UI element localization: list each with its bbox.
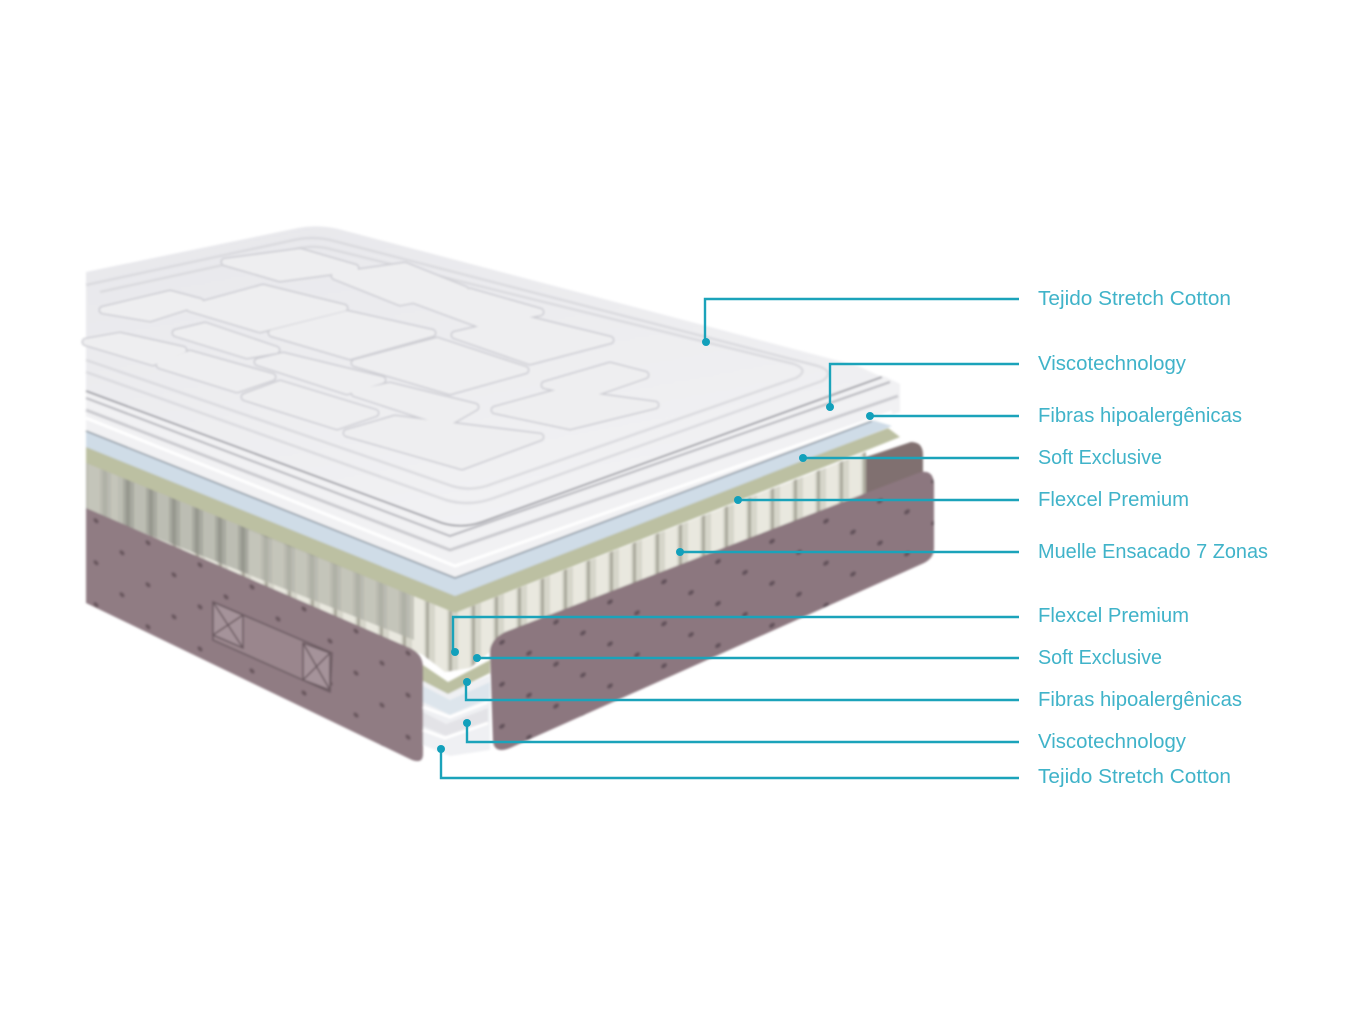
quilted top panel: [86, 226, 882, 526]
callout: Flexcel Premium bottom: Flexcel Premium: [1038, 605, 1189, 627]
callout: Flexcel Premium top: Flexcel Premium: [1038, 489, 1189, 511]
callout: Viscotechnology bottom: [463, 719, 1186, 753]
right side cover panel: [490, 472, 934, 750]
callout: Flexcel Premium bottom: [451, 605, 1189, 656]
callout: Tejido Stretch Cotton bottom: Tejido Stretch Cotton: [1038, 766, 1231, 788]
callout: Muelle Ensacado 7 Zonas: [676, 541, 1268, 563]
callout: Fibras hipoalergénicas top: Fibras hipoalergênicas: [1038, 405, 1242, 427]
quilted block pattern: [86, 252, 655, 466]
callout: Viscotechnology top: [826, 353, 1186, 411]
back foam panel: [866, 442, 923, 496]
callout: Soft Exclusive top: Soft Exclusive: [1038, 447, 1162, 469]
green foam upper layer: [86, 428, 900, 613]
front lower layers: [423, 660, 490, 756]
callout: Soft Exclusive top: [799, 447, 1162, 469]
left side cover panel: [86, 508, 423, 761]
blue soft layer: [86, 420, 892, 596]
callout: Tejido Stretch Cotton top: Tejido Stretch Cotton: [1038, 288, 1231, 310]
carry handle: [213, 602, 332, 692]
callout: Soft Exclusive bottom: [473, 647, 1162, 669]
callout: Viscotechnology bottom: Viscotechnology: [1038, 731, 1186, 753]
callout: Flexcel Premium top: [734, 489, 1189, 511]
callout: Tejido Stretch Cotton top: [702, 288, 1231, 346]
callout: Fibras hipoalergénicas top: [866, 405, 1242, 427]
callout: Fibras hipoalergénicas bottom: Fibras hipoalergênicas: [1038, 689, 1242, 711]
mattress illustration: [86, 226, 934, 761]
callout: Soft Exclusive bottom: Soft Exclusive: [1038, 647, 1162, 669]
fibre layer: [86, 376, 900, 578]
callout: Tejido Stretch Cotton bottom: [437, 745, 1231, 788]
callout: Muelle Ensacado 7 Zonas: Muelle Ensacado 7 Zonas: [1038, 541, 1268, 563]
spring core: [86, 452, 866, 672]
callout: Fibras hipoalergénicas bottom: [463, 678, 1242, 711]
callout: Viscotechnology top: Viscotechnology: [1038, 353, 1186, 375]
